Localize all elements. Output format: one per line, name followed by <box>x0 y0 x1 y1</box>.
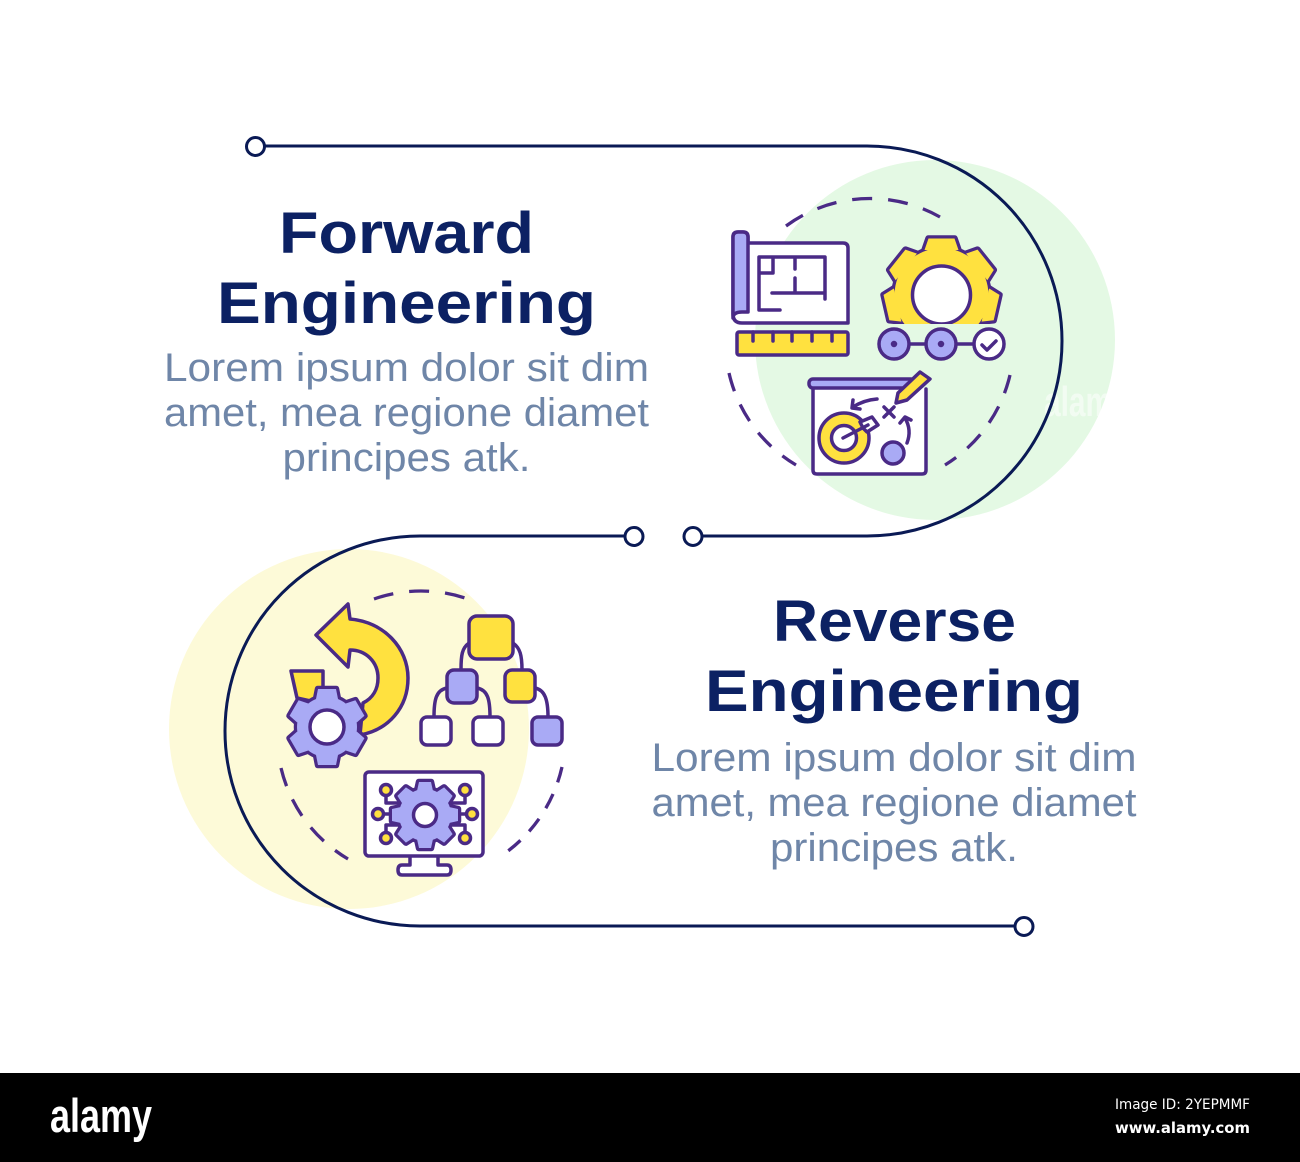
footer logo: alamy <box>50 1089 152 1142</box>
heading: Forward Engineering: Engineering <box>217 271 596 336</box>
icon: strategy board with target and pencil <box>809 372 930 474</box>
text block: Forward Engineering description: amet, mea regione diamet <box>164 391 649 435</box>
heading: Forward Engineering <box>217 201 596 336</box>
footer image id and site: www.alamy.com <box>1115 1119 1250 1137</box>
text block: Reverse Engineering description: amet, mea regione diamet <box>652 781 1136 825</box>
heading: Reverse Engineering: Engineering <box>705 659 1083 724</box>
text block: Forward Engineering description: Lorem ipsum dolor sit dim <box>164 346 649 390</box>
text block: Reverse Engineering description: Lorem ipsum dolor sit dim <box>652 736 1136 780</box>
dashed ring: reverse icons <box>281 591 562 859</box>
dashed ring: forward icons <box>729 199 1010 465</box>
footer image id and site: Image ID: 2YEPMMF <box>1115 1097 1250 1113</box>
heading: Forward Engineering: Forward <box>279 201 534 266</box>
yellow accent circle <box>169 549 529 909</box>
green accent circle <box>755 160 1115 520</box>
icon: reverse arrow with gear <box>289 604 408 765</box>
heading: Reverse Engineering: Reverse <box>773 589 1016 654</box>
icon: monitor with circuit gear <box>365 772 483 875</box>
icon: blueprint with ruler <box>733 232 848 355</box>
text block: Reverse Engineering description <box>652 736 1136 870</box>
bottom connector line with end dots <box>225 528 1033 936</box>
text block: Forward Engineering description <box>164 346 649 480</box>
watermark on green circle: alam <box>1044 378 1112 425</box>
icon: hierarchy tree <box>421 616 562 745</box>
text block: Reverse Engineering description: principes atk. <box>770 826 1018 870</box>
icon: yellow gear with process steps <box>879 238 1004 359</box>
heading: Reverse Engineering <box>705 589 1083 724</box>
footer bar <box>0 1073 1300 1162</box>
top connector line with end dots <box>246 138 1062 546</box>
footer image id and site <box>1115 1097 1250 1137</box>
text block: Forward Engineering description: principes atk. <box>282 436 530 480</box>
